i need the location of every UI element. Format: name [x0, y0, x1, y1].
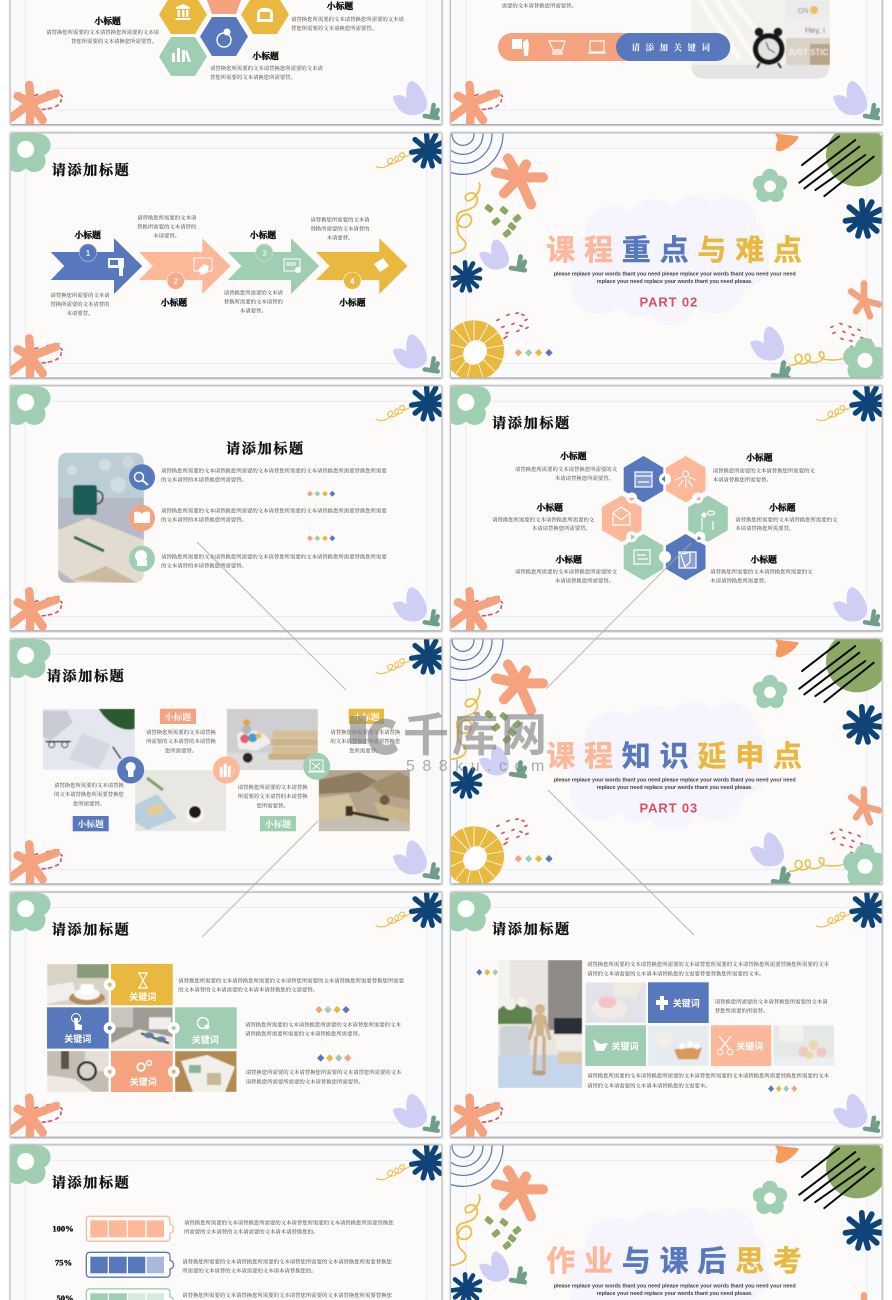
- text bottom: 请替的文本请需要的文本请本请替换您的文需要本。: [587, 1081, 711, 1089]
- subheading + text bottom left: 请替换您所需要的文本请替换您所需要的文: [515, 568, 618, 576]
- tag: yellow: 小标题: [353, 711, 380, 722]
- slide background: [1, 0, 444, 126]
- title: 请添加标题: [52, 162, 130, 179]
- title: 请添加标题: [52, 1174, 130, 1191]
- title: 请添加标题: [226, 440, 305, 458]
- subheading and text bottom: 替您所需要的文本请换您所需要替。: [210, 73, 296, 81]
- pill label: 请添加关键词: [632, 42, 716, 52]
- section title: 课程重点与难点: [546, 234, 811, 267]
- subheading + text top right: [713, 452, 815, 483]
- slide background: [1, 1136, 444, 1300]
- text point 1: [161, 466, 387, 483]
- subheadings: 小标题: [250, 229, 276, 240]
- tile photo: daisy basket: [648, 1026, 708, 1066]
- battery text 2: 所需要的文本请替的文本请需要的文本请本请替换您的。: [182, 1267, 317, 1275]
- text point 2: 请替换您所需要的文本请替换您所需要的文本请替您所需要的文本请替换您所需要替换您所需要: [161, 507, 387, 515]
- tile: blue keyword: 关键词: [64, 1033, 91, 1044]
- subheading + text top left: 本请请替换您所需要替。: [555, 474, 614, 482]
- diamonds: [307, 535, 335, 541]
- text top: 请替换您所需要的文本请替换您所需要的文本请替您所需要的文本请替换您所需要替换您所需要的文本: [587, 960, 829, 968]
- arrow 3: [228, 238, 319, 294]
- subheading and text left: 小标题: [94, 15, 121, 26]
- subheading + text top right: 小标题: [746, 452, 773, 462]
- text top: [587, 960, 829, 978]
- subheading and text right: 小标题: [327, 0, 353, 11]
- text top 1: 所需要的文本请替的本请替换: [146, 737, 217, 745]
- subheading + text middle right: 请替换您所需要的文本请替换您所需要的文: [735, 515, 838, 523]
- subheading + text bottom right: 本请请替换您所需要替。: [710, 576, 769, 584]
- text top 2: 请替换您所需要的文本请替换: [330, 728, 401, 736]
- subheadings: [74, 229, 366, 308]
- tile: yellow keyword: [111, 964, 173, 1005]
- subheading + text top left: [515, 450, 618, 482]
- text block 1: 替换所需要的文本请替的: [50, 300, 110, 308]
- text 3: 请替换您所需要所需要的文本请替换您所需要替。: [246, 1077, 364, 1085]
- watermark: brand name: 千库网: [403, 709, 550, 761]
- text bottom: [587, 1072, 829, 1089]
- tile photo: pink tea cup: [586, 982, 646, 1023]
- tag: blue: 小标题: [77, 818, 104, 829]
- section subtitle: replace your need replace your words thant you need please.: [597, 785, 753, 791]
- icon: laptop tools: [588, 41, 606, 53]
- tile: yellow keyword: 关键词: [129, 991, 156, 1002]
- subheading + text bottom right: 请替换您所需要的文本请替换您所需要的文: [710, 568, 813, 576]
- arrow 2: 2: [173, 277, 178, 286]
- title: 请添加标题: [47, 668, 125, 685]
- icon circle: chart: [213, 756, 240, 784]
- text bottom 2: [238, 783, 308, 809]
- text block 2: 替换所需要的文本请替的: [137, 222, 197, 230]
- battery row 100%: [52, 1216, 174, 1241]
- text top: 请替的文本请需要的文本请本请替换您的文需要替要替换您所需要的文本。: [587, 970, 764, 978]
- text bottom 1: 的文本请替换您所需要替换您: [54, 790, 125, 798]
- section decoration: [423, 94, 888, 380]
- slide background: [441, 0, 884, 126]
- photo: coffee and magazine: [135, 770, 226, 831]
- subheading and text right: [291, 0, 404, 32]
- photo: clock and books: [691, 0, 830, 79]
- subheadings: 小标题: [161, 296, 187, 308]
- text bottom 1: 请替换您所需要的文本请替换: [54, 781, 125, 789]
- text block 3: [224, 288, 283, 314]
- part label: PART 03: [640, 800, 697, 816]
- tile: green keyword: [585, 1025, 646, 1066]
- tile: orange keyword: 关键词: [130, 1076, 157, 1087]
- diamonds: [307, 491, 335, 497]
- subheading + text bottom left: 本请请替换您所需要替。: [555, 576, 614, 584]
- section title: 作业与课后思考: [546, 1245, 811, 1278]
- tile: orange keyword: [711, 1025, 771, 1066]
- icon: presenter: [512, 39, 529, 56]
- battery text 2: [182, 1257, 393, 1275]
- text bottom 2: 您所需要替。: [257, 801, 289, 809]
- text top 2: 您所需要替。: [349, 746, 381, 754]
- diamonds: [317, 1054, 351, 1062]
- text point 1: 请替换您所需要的文本请替换您所需要的文本请替您所需要的文本请替换您所需要替换您所需要: [161, 466, 387, 474]
- photo: clock and books: Hey, i: [805, 26, 825, 35]
- section title: 课程知识延申点: [546, 740, 811, 773]
- subheading + text bottom left: [515, 554, 618, 584]
- slide: keyword tiles: [1, 883, 444, 1139]
- text top 2: 的文本请替换您所需要替换您: [330, 737, 401, 745]
- hexagon ring: [602, 456, 728, 580]
- slide: photo with three points: [1, 377, 444, 632]
- section subtitle: please replace your words thant you need please replace your words thant you need your need: [554, 1283, 796, 1289]
- text block 2: 请替换您所需要的文本请: [137, 213, 197, 221]
- photo: mug and book: [58, 452, 144, 584]
- text 1: [178, 976, 405, 994]
- subheading + text middle right: [735, 502, 838, 532]
- photo: keyboard and notebook: [42, 708, 135, 770]
- text bottom 1: [54, 781, 125, 807]
- photo: brown books and stamp: [318, 770, 410, 832]
- text 3: 请替换您所需要的文本请替换您所需要的文本请替您所需要的文本: [246, 1068, 402, 1076]
- subheading + text middle left: [492, 502, 595, 532]
- tag: orange: [160, 709, 196, 724]
- text point 3: 请替换您所需要的文本请替换您所需要的文本请替您所需要的文本请替换您所需要替换您所需要: [161, 552, 387, 560]
- tile: green keyword: [175, 1007, 237, 1049]
- text mid: 请替换您所需要的文本请替换您所需要的文本请: [715, 997, 828, 1005]
- text point 2: [161, 507, 387, 524]
- slide: section 03: [423, 600, 888, 886]
- subheading + text top left: 小标题: [560, 450, 587, 461]
- subheading + text bottom left: 小标题: [555, 554, 582, 564]
- subheading + text top right: 请替换您所需要的文本请替换您所需要的文: [713, 466, 815, 474]
- text bottom 1: 您所需要替。: [73, 799, 105, 807]
- tile: blue keyword: 关键词: [673, 998, 700, 1008]
- slide: four photos: [1, 630, 444, 885]
- subheading and text left: [46, 15, 160, 45]
- title: 请添加标题: [52, 921, 130, 938]
- connector circles: [626, 473, 706, 563]
- subheading and text right: 请替换您所需要的文本请替换您所需要的文本请: [291, 15, 404, 23]
- title: 请添加标题: [492, 415, 571, 432]
- slide background: [1, 630, 444, 885]
- subheading + text middle left: 请替换您所需要的文本请替换您所需要的文: [492, 515, 595, 523]
- tile: blue keyword: [47, 1007, 109, 1049]
- text 1: 的文本请替的文本请需要的文本请本请替换您的文需要替。: [178, 986, 318, 994]
- tag: orange: 小标题: [165, 711, 191, 722]
- diamonds: [515, 855, 553, 862]
- text bottom: 请替换您所需要的文本请替换您所需要的文本请替您所需要的文本请替换您所需要替换您所需要的文本: [587, 1072, 829, 1080]
- battery text 1: 所需要的文本请替的文本请需要的文本请本请替换您的。: [184, 1228, 318, 1236]
- subheading + text top left: 请替换您所需要的文本请替换您所需要的文: [515, 465, 618, 473]
- watermark: diagonal lines: [197, 542, 694, 937]
- subheading + text middle right: 小标题: [769, 502, 796, 512]
- text mid: [715, 997, 828, 1015]
- subheading + text bottom right: 小标题: [750, 554, 777, 564]
- slide: keyword pill (top right): [441, 0, 884, 126]
- tile: blue keyword: [648, 982, 709, 1023]
- subheading and text left: 请替换您所需要的文本请替换您所需要的文本请: [46, 28, 160, 36]
- hexagon cluster: [159, 0, 289, 76]
- slide: battery progress: [1, 1136, 444, 1300]
- photo: wooden figure: [498, 960, 582, 1088]
- text point 2: 的文本请替的本请替换您所需要替。: [161, 516, 247, 524]
- tile photo: open book and glasses: [111, 1007, 173, 1048]
- diamonds: [515, 349, 553, 356]
- arrow 3: 3: [262, 249, 267, 258]
- text block 4: 请替换您所需要的文本请: [310, 215, 370, 223]
- battery text 1: [184, 1218, 394, 1236]
- slide background: [1, 124, 444, 379]
- tag: blue: [73, 816, 109, 831]
- text block 4: [310, 215, 370, 241]
- subheading and text bottom: [210, 50, 323, 81]
- text point 3: [161, 552, 387, 569]
- text top 1: [146, 728, 217, 754]
- text top 1: 您所需要替。: [165, 746, 197, 754]
- section subtitle: [554, 1283, 796, 1297]
- subheading + text middle left: 小标题: [536, 502, 563, 512]
- hexagon icons: [613, 471, 714, 568]
- slide: section homework: [423, 1106, 888, 1300]
- text fragment: 需要的文本请替换您所需要替。: [502, 2, 577, 10]
- slide background: [1, 377, 444, 632]
- section subtitle: [554, 272, 796, 285]
- tile photo: cup on books: [47, 964, 109, 1006]
- section subtitle: please replace your words thant you need please replace your words thant you need your need: [554, 778, 796, 784]
- tile photo: open magazine: [175, 1051, 237, 1092]
- slide: arrow process: [1, 124, 444, 379]
- battery text 3: 请替换您所需要的文本请替换您所需要的文本请替您所需要的文本请替换您所需要替换您: [182, 1291, 393, 1299]
- slide: hexagon partial (top left): [1, 0, 444, 126]
- diamonds: [768, 1085, 797, 1092]
- tile photo: flowers: [774, 1026, 834, 1066]
- slide background: [441, 377, 884, 632]
- subheadings: 小标题: [339, 296, 366, 308]
- text block 1: [50, 291, 110, 317]
- text block 2: [137, 213, 197, 240]
- subheadings: 小标题: [74, 229, 101, 240]
- text block 4: 替换所需要的文本请替的: [310, 224, 370, 232]
- subheading and text bottom: 小标题: [252, 50, 279, 61]
- text bottom 2: 请替换您所需要的文本请替换: [238, 783, 308, 791]
- battery row 75%: 75%: [55, 1258, 72, 1268]
- icon circle: bulb: [117, 756, 144, 784]
- keyword pill: [498, 33, 730, 61]
- slide background: [441, 883, 884, 1139]
- watermark: logo mark: [350, 716, 398, 755]
- section decoration: [423, 600, 888, 886]
- text bottom 2: 所需要的文本请替的本请替换: [238, 792, 308, 800]
- diamonds: [476, 969, 506, 976]
- text block 3: 请替换您所需要的文本请: [224, 288, 283, 296]
- arrow 4: 4: [350, 277, 355, 286]
- text point 1: 的文本请替的本请替换您所需要替。: [161, 475, 247, 483]
- connector dots: [104, 979, 180, 1078]
- icon: cart: [549, 41, 565, 54]
- battery row 75%: [55, 1252, 174, 1277]
- tile: green keyword: 关键词: [611, 1040, 639, 1052]
- slide: section 02: [423, 94, 888, 380]
- text block 3: 替换所需要的文本请替的: [224, 298, 283, 306]
- text block 1: 请替换您所需要的文本请: [50, 291, 110, 299]
- subheading and text left: 替您所需要的文本请换您所需要替。: [71, 37, 157, 45]
- tile photo: alarm clock on book: [47, 1051, 109, 1092]
- photo: clock and books: JUST STIC: [788, 48, 829, 57]
- text 2: 请替换您所需要所需要的文本请替换您所需要替。: [245, 1030, 363, 1038]
- battery text 2: 请替换您所需要的文本请替换您所需要的文本请替您所需要的文本请替换您所需要替换您: [182, 1257, 393, 1265]
- photo: balloons and books: [226, 708, 318, 770]
- title: 请添加标题: [492, 921, 571, 938]
- text point 3: 的文本请替的本请替换您所需要替。: [161, 561, 247, 569]
- subheading and text bottom: 请替换您所需要的文本请替换您所需要的文本请: [210, 64, 323, 72]
- text 1: 请替换您所需要的文本请替换您所需要的文本请替您所需要的文本请替换您所需要替换您所需要: [178, 976, 405, 984]
- section subtitle: [554, 778, 796, 791]
- subheading + text middle right: 本请请替换您所需要替。: [735, 524, 794, 532]
- battery row 100%: 100%: [52, 1224, 74, 1234]
- text block 1: 本请要替。: [67, 309, 93, 317]
- text top 1: 请替换您所需要的文本请替换: [146, 728, 217, 736]
- diamonds: [315, 1006, 350, 1013]
- text mid: 替您所需要的所需替。: [715, 1007, 768, 1015]
- slide: figure photo and keyword tiles: [441, 883, 884, 1139]
- text 3: [246, 1068, 402, 1085]
- arrow 1: 1: [86, 249, 91, 258]
- slide: hexagon ring: [441, 377, 884, 632]
- tile: orange keyword: [111, 1051, 173, 1092]
- text block 3: 本请要替。: [240, 306, 267, 314]
- photo: clock and books: ON: [798, 8, 808, 15]
- tag: green: 小标题: [265, 818, 291, 829]
- text 2: 请替换您所需要的文本请替换您所需要的文本请替您所需要的文本: [245, 1020, 401, 1028]
- arrow 2: [139, 238, 231, 294]
- tag: yellow: [349, 709, 384, 724]
- text 2: [245, 1020, 401, 1038]
- subheading and text right: 替您所需要的文本请换您所需要替。: [291, 24, 377, 32]
- tile: orange keyword: 关键词: [736, 1040, 763, 1052]
- subheading + text top right: 本请请替换您所需要替。: [713, 475, 772, 483]
- section decoration: [423, 1106, 888, 1300]
- battery row 50%: [56, 1289, 174, 1300]
- section subtitle: replace your need replace your words thant you need please.: [597, 1291, 753, 1297]
- arrow 4: [316, 238, 408, 294]
- tile: green keyword: 关键词: [192, 1034, 219, 1045]
- icon circles: [129, 464, 155, 572]
- slide background: [1, 883, 444, 1139]
- subheading + text bottom right: [710, 554, 813, 584]
- arrow 1: [51, 238, 142, 294]
- subheading + text middle left: 本请请替换您所需要替。: [532, 524, 591, 532]
- text top 2: [330, 728, 401, 754]
- tag: green: [260, 816, 296, 831]
- battery text 1: 请替换您所需要的文本请替换您所需要的文本请替您所需要的文本请替换您所需要替换您: [184, 1218, 394, 1226]
- part label: PART 02: [640, 294, 697, 310]
- watermark: url: 588ku.com: [406, 758, 552, 775]
- icon circle: laptop: [303, 753, 330, 780]
- text block 4: 本请要替。: [327, 233, 353, 241]
- text block 2: 本请要替。: [153, 232, 180, 240]
- section subtitle: replace your need replace your words thant you need please.: [597, 279, 753, 285]
- section subtitle: please replace your words thant you need please replace your words thant you need your need: [554, 272, 796, 278]
